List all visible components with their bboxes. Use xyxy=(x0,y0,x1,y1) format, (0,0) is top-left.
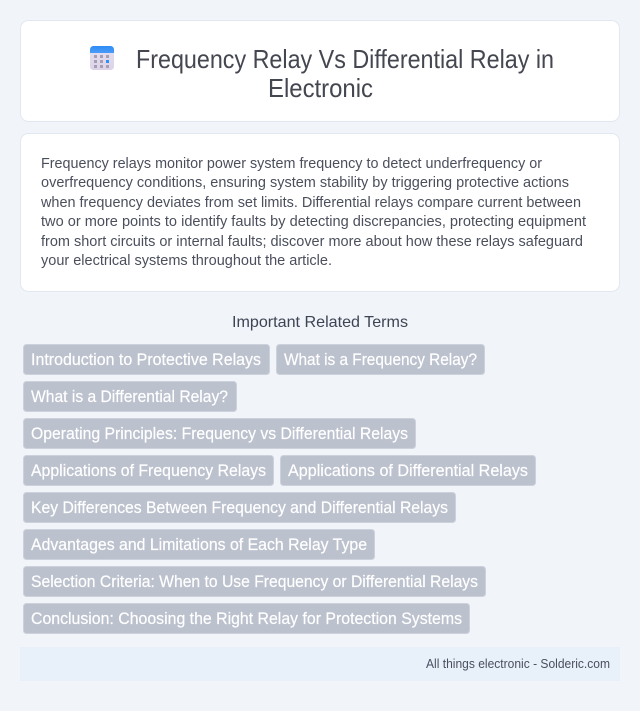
tag: conclusion xyxy=(24,604,470,634)
text block: description xyxy=(40,155,587,269)
tag: operating principles: Operating Principles: Frequency vs Differential Relays xyxy=(31,425,408,443)
footer: All things electronic - Solderic.com xyxy=(426,657,610,671)
tag: what is a frequency relay: What is a Frequency Relay? xyxy=(284,351,477,369)
tag: what is a differential relay xyxy=(24,382,236,412)
tag: advantages and limitations xyxy=(24,530,374,560)
tag: advantages and limitations: Advantages and Limitations of Each Relay Type xyxy=(31,536,367,554)
tag: applications of differential relays: Applications of Differential Relays xyxy=(288,462,528,480)
tag: selection criteria xyxy=(24,566,486,596)
tag: what is a frequency relay xyxy=(276,344,484,374)
tag: applications of frequency relays: Applications of Frequency Relays xyxy=(31,462,266,480)
tag: operating principles xyxy=(24,418,416,448)
text block: description: Frequency relays monitor power system frequency to detect underfrequency or xyxy=(41,155,542,172)
text block: description: two or more points to identify faults by detecting discrepancies, protecting equipment xyxy=(41,213,587,230)
text block: description: your electrical systems throughout the article. xyxy=(41,252,332,269)
text block: description: from short circuits or internal faults; discover more about how these relays safeguard xyxy=(41,233,583,250)
panel: title card xyxy=(20,20,620,122)
tag: conclusion: Conclusion: Choosing the Right Relay for Protection Systems xyxy=(31,610,462,628)
icon: calendar xyxy=(90,46,114,70)
tag: selection criteria: Selection Criteria: When to Use Frequency or Differential Relays xyxy=(31,573,478,591)
title: Electronic xyxy=(268,73,373,103)
text block: description: overfrequency conditions, ensuring system stability by triggering protective actions xyxy=(41,174,569,191)
tag: introduction: Introduction to Protective Relays xyxy=(31,351,261,369)
text block: description: when frequency deviates from set limits. Differential relays compare current between xyxy=(40,194,581,211)
tag list: related terms xyxy=(24,344,536,634)
tag: applications of frequency relays xyxy=(24,456,274,486)
title xyxy=(136,44,554,103)
tag: what is a differential relay: What is a Differential Relay? xyxy=(31,388,228,406)
tag: key differences xyxy=(24,492,456,522)
tag: key differences: Key Differences Between Frequency and Differential Relays xyxy=(31,499,448,517)
title: Frequency Relay Vs Differential Relay in xyxy=(136,44,554,74)
heading: related terms: Important Related Terms xyxy=(232,314,408,331)
panel: description xyxy=(20,134,620,292)
tag: introduction xyxy=(24,344,270,374)
footer xyxy=(20,647,620,681)
tag: applications of differential relays xyxy=(280,456,536,486)
